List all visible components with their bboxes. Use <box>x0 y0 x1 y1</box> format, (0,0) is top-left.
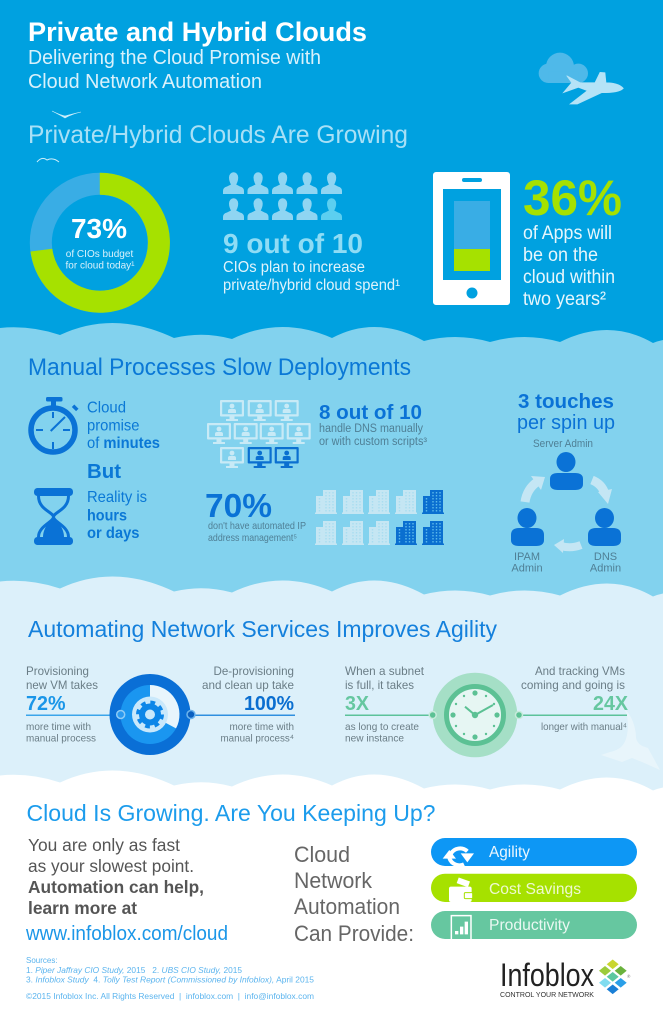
text: call to action <box>25 835 228 945</box>
panel: manual processes <box>0 323 663 600</box>
icon: faint bird <box>601 707 660 770</box>
heading: manual processes: Manual Processes Slow Deployments <box>28 354 411 381</box>
diagram: admin cycle: Admin <box>590 562 621 574</box>
donut chart 73% <box>41 184 159 302</box>
pill: cost savings <box>431 874 637 902</box>
stat: tracking VMs 24X: 24X <box>593 693 629 715</box>
text: call to action: learn more at <box>28 898 137 918</box>
pill: cost savings: Cost Savings <box>489 881 581 898</box>
icon: bird <box>52 111 81 118</box>
stat: 36%: 36% <box>523 170 622 226</box>
text: can provide: Automation <box>294 894 400 919</box>
stat: 36%: cloud within <box>523 267 615 288</box>
stat: de-provisioning 100%: more time with <box>230 721 294 733</box>
text: can provide: Can Provide: <box>294 921 414 946</box>
subtitle <box>28 47 321 93</box>
icon: bird small <box>37 158 59 162</box>
stat: 8 out of 10 <box>319 401 427 448</box>
logo: infoblox: ® <box>627 973 631 979</box>
stat: subnet 3X: When a subnet <box>345 664 425 678</box>
stat: tracking VMs 24X: coming and going is <box>521 678 625 692</box>
stat: 70%: address management⁵ <box>208 532 297 544</box>
stat: de-provisioning 100%: manual process⁴ <box>220 733 294 745</box>
stat: 9 out of 10: CIOs plan to increase <box>223 259 365 276</box>
stat: 8 out of 10: or with custom scripts³ <box>319 436 427 448</box>
stat: 70%: don't have automated IP <box>208 520 306 532</box>
text: cloud promise: promise <box>87 418 140 434</box>
donut chart 73%: 73% <box>71 213 127 244</box>
stat: de-provisioning 100%: and clean up take <box>202 678 294 692</box>
panel: clouds are growing <box>28 17 623 310</box>
heading: automating: Automating Network Services Improves Agility <box>28 616 497 642</box>
stat: 9 out of 10 <box>223 228 400 294</box>
text: call to action: as your slowest point. <box>28 856 194 876</box>
stat: 36% <box>523 170 622 310</box>
stat: provisioning 72%: more time with <box>26 721 91 733</box>
stat: provisioning 72%: 72% <box>26 693 66 715</box>
subtitle: Cloud Network Automation <box>28 71 262 93</box>
stat: 9 out of 10: private/hybrid cloud spend¹ <box>223 277 400 294</box>
heading: 3 touches: 3 touches <box>518 391 614 413</box>
stat: tracking VMs 24X: And tracking VMs <box>535 664 625 678</box>
stat: 70%: 70% <box>205 488 272 525</box>
icon: buildings 70% <box>315 490 444 545</box>
section heading: Private/Hybrid Clouds Are Growing <box>28 121 408 149</box>
logo: infoblox: Infoblox <box>500 957 594 993</box>
text: call to action: www.infoblox.com/cloud <box>25 923 228 945</box>
pill: agility: Agility <box>489 844 530 861</box>
icon: gear dial <box>110 674 195 755</box>
text: cloud promise: or days <box>87 525 140 542</box>
stat: de-provisioning 100%: De-provisioning <box>214 664 294 678</box>
text: can provide: Network <box>294 868 373 893</box>
text: cloud promise: hours <box>87 508 127 524</box>
sources <box>26 956 315 1001</box>
donut chart 73%: of CIOs budget <box>66 248 133 260</box>
icon: people row <box>223 172 342 220</box>
text: cloud promise <box>87 400 160 542</box>
text: cloud promise: But <box>87 461 121 483</box>
stat: 9 out of 10: 9 out of 10 <box>223 228 363 259</box>
stat: provisioning 72%: Provisioning <box>26 664 89 678</box>
diagram: admin cycle: Admin <box>511 562 543 574</box>
icon: hourglass <box>34 488 73 545</box>
stat: subnet 3X: 3X <box>345 693 370 715</box>
subtitle: Delivering the Cloud Promise with <box>28 47 321 69</box>
stat: tracking VMs 24X <box>519 664 629 733</box>
diagram: admin cycle <box>511 438 621 574</box>
stat: 70% <box>205 488 306 544</box>
logo: infoblox: CONTROL YOUR NETWORK <box>500 990 594 999</box>
sources: 1. Piper Jaffray CIO Study, 2015 2. UBS CIO Study, 2015 <box>26 966 243 975</box>
icon: cloud <box>539 53 588 83</box>
diagram: admin cycle: IPAM <box>514 551 540 563</box>
pill: productivity <box>431 911 637 939</box>
stat: de-provisioning 100%: 100% <box>244 693 294 715</box>
stat: provisioning 72% <box>26 664 116 745</box>
sources: 3. Infoblox Study 4. Tolly Test Report (Commissioned by Infoblox), April 2015 <box>26 976 315 984</box>
title: Private and Hybrid Clouds <box>28 17 367 47</box>
stat: subnet 3X: as long to create <box>345 721 419 733</box>
stat: 36%: of Apps will <box>523 223 612 244</box>
text: call to action: You are only as fast <box>28 835 180 855</box>
icon: stopwatch <box>31 397 79 452</box>
text: cloud promise: of minutes <box>87 435 160 452</box>
stat: 8 out of 10: handle DNS manually <box>319 423 423 435</box>
pill: agility <box>431 838 637 866</box>
stat: subnet 3X: new instance <box>345 733 404 745</box>
stat: provisioning 72%: new VM takes <box>26 678 98 692</box>
heading: 3 touches: per spin up <box>517 412 615 434</box>
stat: 8 out of 10: 8 out of 10 <box>319 401 422 424</box>
text: cloud promise: Reality is <box>87 489 147 506</box>
pill: productivity: Productivity <box>489 917 570 934</box>
text: cloud promise: Cloud <box>87 400 126 416</box>
sources: ©2015 Infoblox Inc. All Rights Reserved | infoblox.com | info@infoblox.com <box>26 992 314 1001</box>
stat: 36%: be on the <box>523 245 598 266</box>
diagram: admin cycle: Server Admin <box>533 438 593 450</box>
icon: phone <box>433 172 510 305</box>
stat: de-provisioning 100% <box>190 664 295 745</box>
stat: 36%: two years² <box>523 289 606 310</box>
sources: Sources: <box>26 956 58 965</box>
stat: subnet 3X <box>345 664 433 745</box>
icon: clock <box>429 673 522 757</box>
diagram: admin cycle: DNS <box>594 551 617 563</box>
stat: provisioning 72%: manual process <box>26 733 96 745</box>
donut chart 73%: for cloud today¹ <box>66 260 135 272</box>
icon: airplane <box>563 72 623 104</box>
heading: keeping up: Cloud Is Growing. Are You Keeping Up? <box>26 800 436 826</box>
stat: tracking VMs 24X: longer with manual⁴ <box>541 721 627 733</box>
heading: 3 touches <box>517 391 615 434</box>
text: call to action: Automation can help, <box>28 877 204 897</box>
icon: monitors 8 of 10 <box>207 400 311 468</box>
panel: keeping up <box>0 770 663 1024</box>
stat: subnet 3X: is full, it takes <box>345 678 414 692</box>
text: can provide: Cloud <box>294 842 350 867</box>
panel: automating network services <box>0 576 663 794</box>
text: can provide <box>294 842 414 946</box>
